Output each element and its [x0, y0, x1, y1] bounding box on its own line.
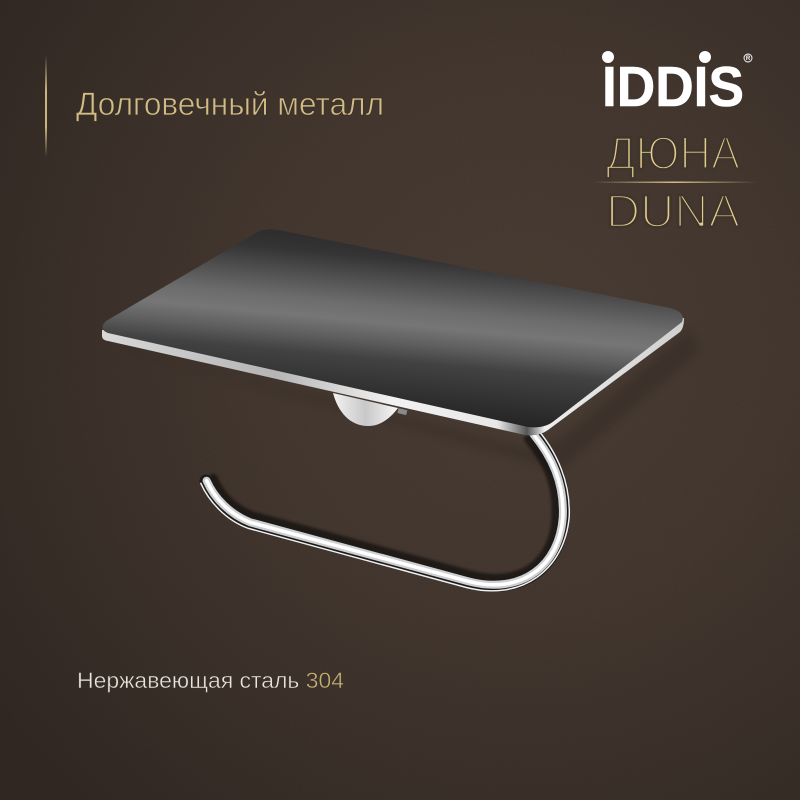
mount screw: [397, 408, 407, 415]
shelf top surface: [102, 229, 683, 427]
wall shadow: [110, 330, 700, 470]
shelf side edge: [102, 318, 684, 435]
heading: durable metal: Долговечный металл: [76, 86, 384, 122]
vertical gold rule: [45, 55, 47, 157]
caption: stainless steel 304: Нержавеющая сталь 304: [77, 668, 344, 693]
collection name: Дюна / Duna: ДЮНА: [606, 127, 740, 179]
wall mount disc: [333, 393, 398, 426]
collection name: Дюна / Duna: DUNA: [606, 185, 740, 237]
product: toilet paper holder with shelf: [102, 229, 700, 591]
arm body: [206, 434, 564, 585]
collection name: Дюна / Duna: [592, 127, 757, 237]
chrome paper arm: [201, 430, 569, 591]
logo: IDDIS: IDDIS: [602, 55, 744, 119]
arm shadow: [213, 439, 556, 578]
logo: IDDIS: R: [746, 56, 751, 62]
